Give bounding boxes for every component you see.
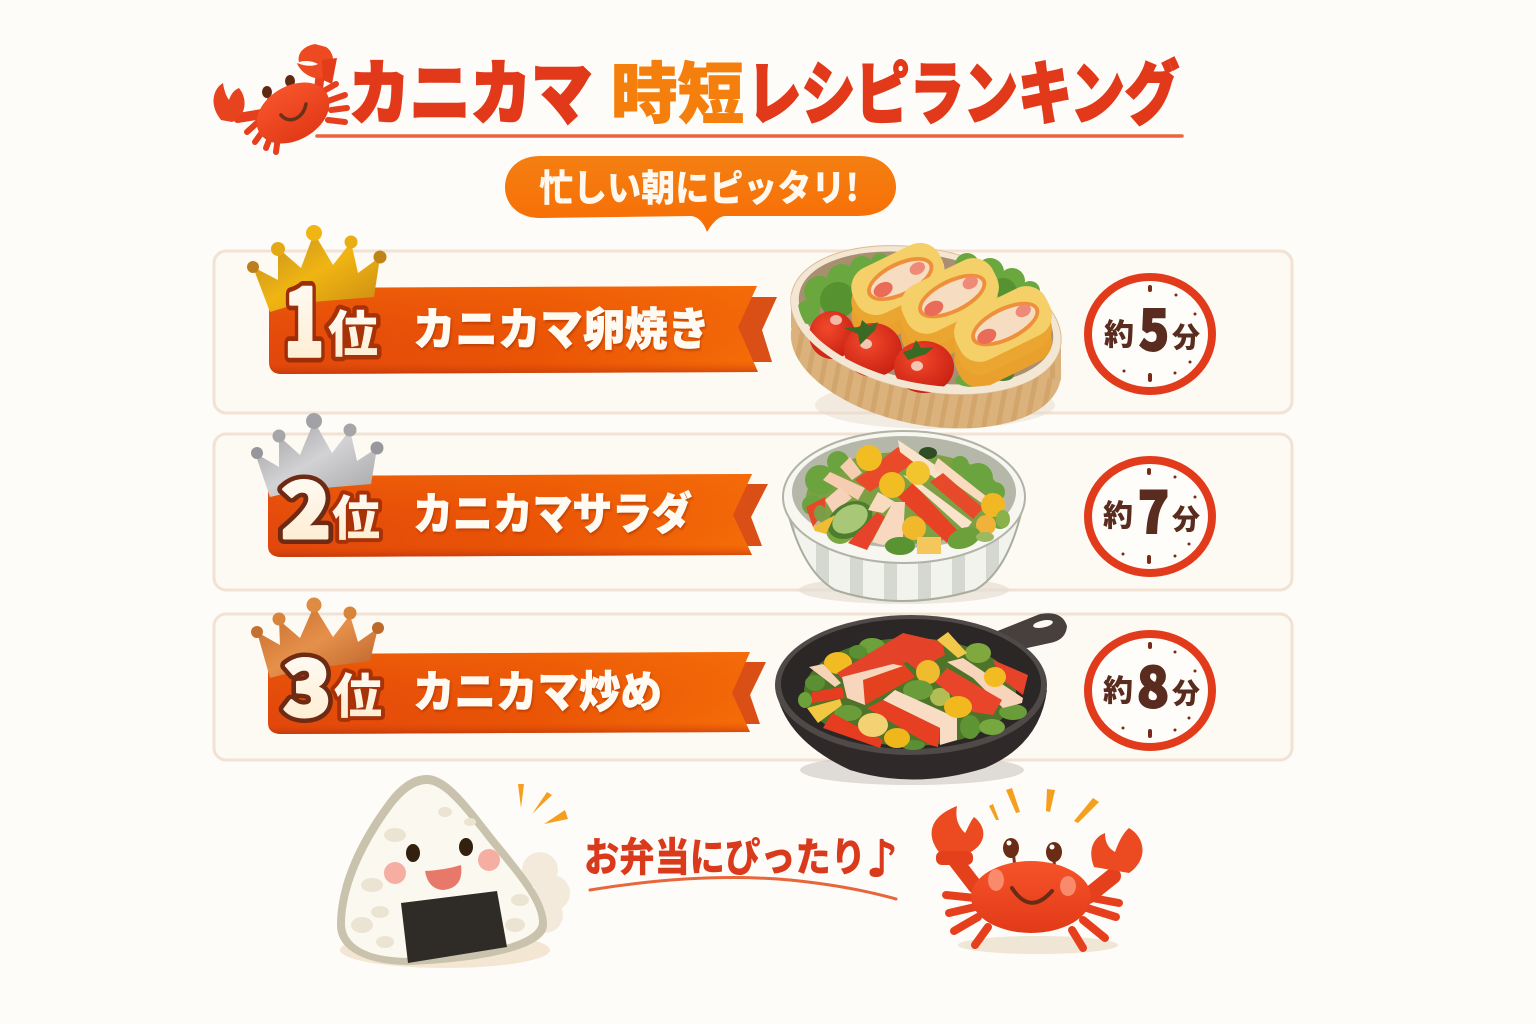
rank label: 3位: 3: [283, 628, 331, 738]
ribbon: rank 2: [268, 474, 768, 557]
stir-fry ingredients: [798, 632, 1028, 750]
crab body: [971, 861, 1091, 933]
rank label: 3位: 位: [334, 657, 382, 727]
icon: title crab: [213, 44, 347, 156]
rank label: 2位: 位: [332, 479, 380, 549]
timer: about 8 minutes: 分: [1172, 672, 1200, 712]
caption: お弁当にぴったり♪: ♪: [866, 830, 898, 888]
crab sticks and vegetables: [806, 440, 1010, 555]
timer: about 5 minutes: 5: [1139, 286, 1169, 366]
crab face: [988, 869, 1076, 903]
title text: 時短: 時短: [611, 41, 744, 137]
caption: お弁当にぴったり♪: お弁当にぴったり: [584, 825, 866, 883]
crab legs: [946, 895, 1119, 948]
rank label: 1位: [284, 250, 378, 383]
panel: rank 3: [214, 598, 1292, 785]
rank label: 1位: 位: [328, 295, 378, 367]
sparkle marks: [989, 788, 1099, 823]
character: happy crab: [932, 788, 1143, 954]
title text: レシピランキング: レシピランキング: [747, 38, 1179, 138]
illustration: tamagoyaki bento: [778, 224, 1074, 450]
recipe name: カニカマサラダ: カニカマサラダ: [413, 478, 692, 542]
lettuce: [796, 253, 1040, 387]
title: [213, 38, 1182, 156]
crab eyes: [1003, 838, 1062, 868]
icon: gold crown: [247, 225, 386, 312]
timer: about 8 minutes: 約: [1103, 666, 1133, 710]
rank label: 1位: 1: [284, 250, 324, 383]
rank label: 3位: [283, 628, 382, 738]
rank label: 1位: 1: [284, 250, 324, 383]
timer: about 5 minutes: 分: [1172, 316, 1200, 356]
timer: about 5 minutes: [1088, 277, 1212, 391]
rank label: 3位: 3: [283, 628, 331, 738]
ribbon: rank 3: [268, 652, 766, 734]
speech bubble: 忙しい朝にピッタリ!: 忙しい朝にピッタリ!: [539, 158, 859, 212]
illustration: salad bowl: [783, 431, 1025, 604]
timer: about 7 minutes: [1088, 460, 1212, 573]
egg roll 2: [894, 251, 1006, 371]
timer: about 7 minutes: 7: [1138, 468, 1169, 550]
egg roll 1: [844, 235, 952, 351]
recipe name: カニカマ卵焼き: カニカマ卵焼き: [413, 293, 710, 358]
timer: about 7 minutes: 分: [1172, 498, 1200, 538]
speech bubble: 忙しい朝にピッタリ!: [505, 156, 896, 232]
crab arms and claws: [932, 806, 1143, 896]
egg roll 3: [947, 279, 1059, 395]
panel: rank 1: [214, 224, 1292, 450]
timer: about 5 minutes: 約: [1104, 310, 1134, 354]
recipe name: カニカマ炒め: カニカマ炒め: [413, 656, 662, 720]
ribbon: rank 1: [269, 286, 777, 374]
tomatoes: [809, 311, 954, 393]
icon: silver crown: [251, 413, 384, 497]
title text: カニカマ: カニカマ: [349, 38, 592, 139]
rank label: 2位: [281, 450, 380, 560]
timer: about 8 minutes: 8: [1137, 643, 1169, 723]
onigiri face: [384, 838, 500, 890]
rank label: 2位: 2: [281, 450, 331, 560]
timer: about 8 minutes: [1088, 634, 1212, 747]
character: onigiri: [337, 775, 570, 968]
timer: about 7 minutes: 約: [1103, 491, 1133, 535]
illustration: frying pan: [775, 613, 1067, 785]
sparkle marks: [518, 784, 568, 824]
lettuce: [802, 451, 1009, 544]
nori: [401, 891, 507, 963]
rank label: 2位: 2: [281, 450, 331, 560]
icon: bronze crown: [251, 598, 384, 678]
panel: rank 2: [214, 413, 1292, 604]
